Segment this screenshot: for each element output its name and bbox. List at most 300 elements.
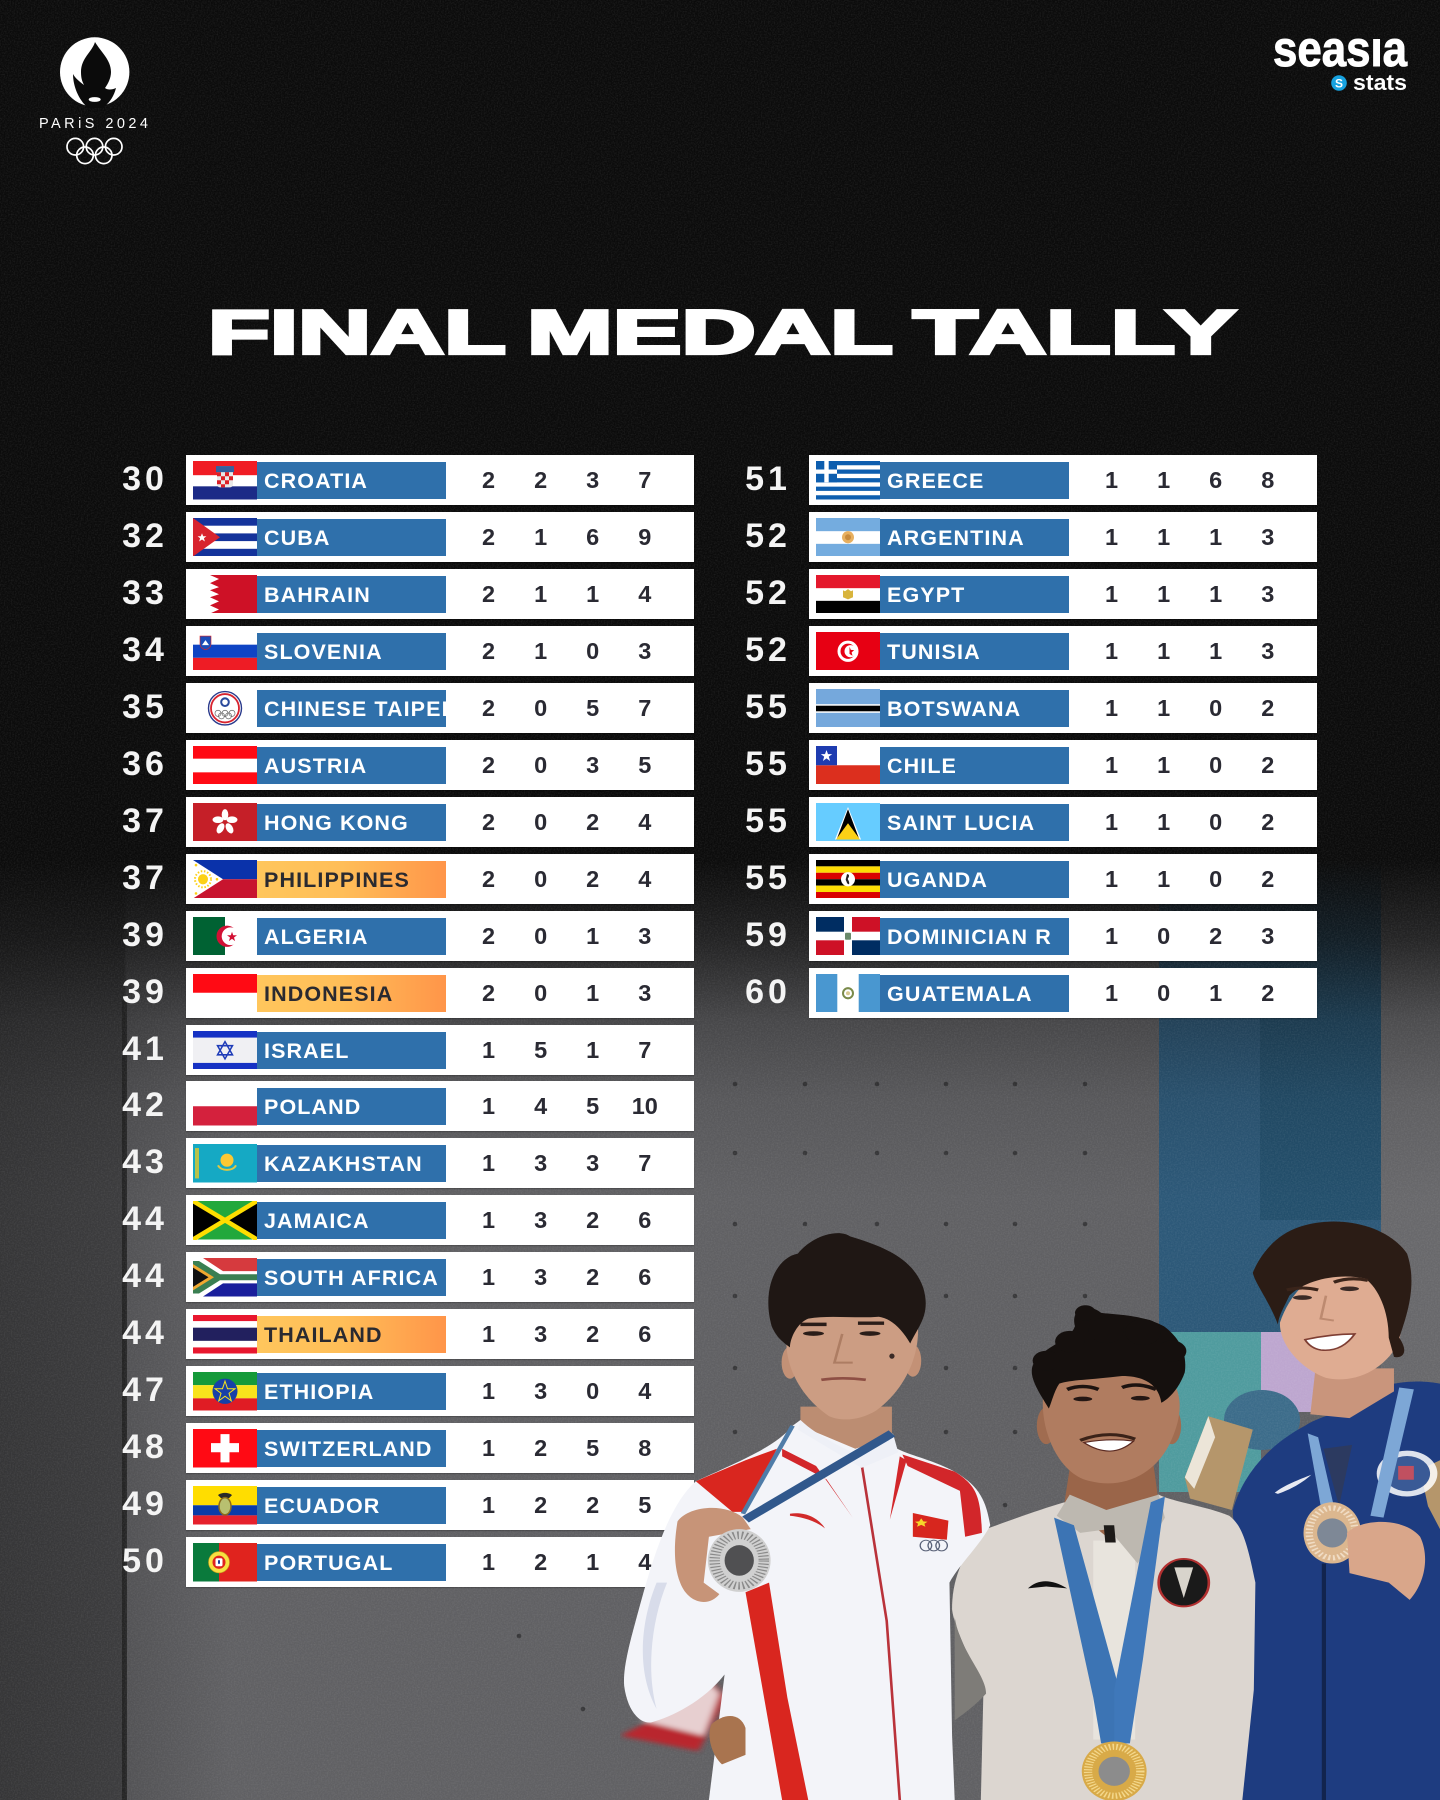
flag: Greece [816,461,880,500]
medal counts [1086,854,1294,904]
flag: Chinese Taipei [208,690,242,726]
medal counts: 1 [534,581,547,607]
row panel [186,1138,694,1188]
medal counts: 1 [1157,809,1170,835]
row panel [186,512,694,562]
rank: 48 [122,1428,168,1466]
logo: Paris 2024 [39,37,148,164]
table: left column ranks 30 to 50 [122,455,694,1588]
row: 37 Hong Kong [122,797,694,847]
medal counts: 1 [1157,581,1170,607]
medal counts: 2 [586,1264,599,1290]
medal counts: 1 [1157,752,1170,778]
row: 39 Indonesia [122,968,694,1019]
medal counts: 1 [1105,980,1118,1006]
rank: 30 [122,460,168,498]
row: 47 Ethiopia [110,1366,694,1416]
country name [257,1544,446,1581]
row: 32 Cuba [122,512,694,562]
row panel [809,968,1317,1018]
medal counts: 1 [534,638,547,664]
row: 55 Uganda [733,854,1317,904]
rank: 60 [745,973,791,1011]
icon: stats coin: S [1335,76,1343,90]
country name [257,1487,446,1524]
emblem: flame in circle [60,37,129,108]
row panel [186,911,694,961]
medal counts: 5 [586,695,599,721]
medal counts [462,1252,671,1302]
rank: 52 [745,574,791,612]
country name: HONG KONG [264,811,409,835]
flag: Jamaica [193,1201,257,1240]
row panel [809,740,1317,790]
medal counts: 2 [586,866,599,892]
medal counts: 0 [534,866,547,892]
country name: EGYPT [887,583,965,607]
rank: 52 [745,517,791,555]
medal counts: 0 [534,980,547,1006]
flag: Poland [193,1106,257,1126]
rank: 37 [122,802,168,840]
rank: 51 [745,460,791,498]
country name [257,975,446,1012]
country name [880,519,1068,556]
medal counts: 1 [586,923,599,949]
medal counts: 2 [534,467,547,493]
medal counts: 2 [586,809,599,835]
row: 35 Chinese Taipei [122,683,694,733]
medal counts: 1 [482,1321,495,1347]
rank: 42 [122,1086,168,1124]
medal counts: 4 [638,866,651,892]
rank: 43 [122,1143,168,1181]
row: 43 Kazakhstan [122,1138,694,1190]
medal counts: 1 [1209,524,1222,550]
medal counts: 2 [586,1321,599,1347]
row: 52 Argentina [733,512,1317,562]
medal counts: 0 [534,752,547,778]
medal counts: 3 [1261,581,1274,607]
row panel [186,1537,694,1587]
medal counts: 4 [638,581,651,607]
country name: AUSTRIA [264,754,367,778]
medal counts: 1 [1209,980,1222,1006]
rank: 39 [122,973,168,1011]
country name [257,462,446,499]
medal counts: 0 [1209,695,1222,721]
row panel [809,569,1317,619]
medal counts: 0 [534,923,547,949]
country name [880,975,1068,1012]
country name [257,747,446,784]
country name [257,1259,446,1296]
medal counts: 1 [1105,524,1118,550]
gold medalist hand on shoulder [709,1716,746,1764]
row panel [186,797,694,847]
country name [257,804,446,841]
row: 60 Guatemala [733,968,1317,1018]
flag: Ethiopia [193,1372,257,1411]
medal counts [462,1195,671,1245]
medal counts [462,1423,671,1473]
medal counts: 5 [586,1435,599,1461]
medal counts: 4 [638,1549,651,1575]
medal counts: 2 [1261,809,1274,835]
row: 50 Portugal [110,1537,694,1587]
country name: CROATIA [264,469,368,493]
row panel [186,1423,694,1473]
medal counts: 7 [638,1150,651,1176]
athletes photo: three medalists [620,1200,1440,1800]
medal counts: 2 [482,866,495,892]
flag: Tunisia [816,632,880,670]
rank: 35 [122,688,168,726]
medal counts: 8 [1261,467,1274,493]
country name [880,918,1068,955]
row: 42 Poland [122,1081,694,1132]
medal counts: 1 [482,1378,495,1404]
flag: South Africa [193,1258,257,1297]
rank: 36 [122,745,168,783]
flag: Argentina [816,518,880,556]
medal counts [1086,911,1294,961]
country name: DOMINICIAN R [887,925,1052,949]
medal counts: 3 [586,1150,599,1176]
row: 55 Chile [733,740,1317,790]
flag: Uganda [816,860,880,898]
flag: Thailand [193,1315,257,1354]
country name: SAINT LUCIA [887,811,1035,835]
row panel [186,1195,694,1245]
row: 55 Saint Lucia [733,797,1317,847]
medal counts: 4 [534,1093,547,1119]
icon: stats coin [1331,75,1347,91]
flag: Austria [193,746,257,784]
flag: Hong Kong [193,803,257,841]
country name [880,462,1068,499]
medal counts: 7 [638,695,651,721]
medal counts [482,467,651,493]
country name: SLOVENIA [264,640,383,664]
country name: ALGERIA [264,925,368,949]
flag: Slovenia [193,636,257,670]
flag: Kazakhstan [193,1144,257,1183]
row: 41 Israel [122,1025,694,1076]
medal counts: 1 [1105,809,1118,835]
flag: Switzerland [193,1429,257,1468]
medal counts: 5 [586,1093,599,1119]
medal counts [482,923,651,949]
row panel [186,683,694,733]
wall dots [517,1082,1087,1711]
medal counts: 6 [638,1207,651,1233]
medal counts: 1 [482,1150,495,1176]
flag: Saint Lucia [816,803,880,841]
olympic rings [67,138,122,164]
medal counts [482,866,652,892]
medal counts [482,980,651,1006]
logo: seasia stats: stats [1353,70,1407,95]
medal counts: 3 [534,1150,547,1176]
medal counts: 1 [1157,866,1170,892]
row panel [809,512,1317,562]
flag: Israel [193,1031,257,1069]
medal counts [482,752,651,778]
rank: 55 [745,688,791,726]
medal counts [1086,569,1294,619]
medal counts: 1 [482,1549,495,1575]
medal counts: 1 [482,1207,495,1233]
flag: Chile [816,746,880,784]
medal counts: 3 [638,923,651,949]
medal counts: 1 [1209,638,1222,664]
row panel [186,455,694,505]
country name: GUATEMALA [887,982,1033,1006]
medal counts: 0 [586,638,599,664]
row: 52 Tunisia [733,626,1317,676]
row panel [186,854,694,904]
row: 49 Ecuador [110,1480,694,1530]
medal counts [462,1537,671,1587]
country name [880,747,1068,784]
medal counts: 2 [482,581,495,607]
flag: Bahrain [210,575,257,613]
country name: BAHRAIN [264,583,371,607]
medal counts: 4 [638,1378,651,1404]
medal counts: 1 [586,980,599,1006]
flag: Cuba [193,518,257,556]
row panel [186,1309,694,1359]
flag: Botswana [816,689,880,727]
table: right column ranks 51 to 60 [733,455,1317,1018]
rank: 34 [122,631,168,669]
rank: 37 [122,859,168,897]
rank: 49 [122,1485,168,1523]
medal counts: 1 [586,1549,599,1575]
medal counts [462,1138,671,1188]
rank: 55 [745,802,791,840]
medal counts: 6 [638,1264,651,1290]
medal counts: 1 [534,524,547,550]
country name: ISRAEL [264,1038,349,1062]
medal counts: 1 [1157,695,1170,721]
rank: 52 [745,631,791,669]
medal counts: 1 [1105,467,1118,493]
rank: 32 [122,517,168,555]
logo: seasia stats [1274,38,1408,95]
row: 30 Croatia [122,455,694,505]
country name [257,519,446,556]
medal counts [1086,512,1294,562]
flag: Egypt [816,575,880,613]
medal counts: 0 [1157,923,1170,949]
medal counts [482,524,651,550]
medal counts: 2 [534,1435,547,1461]
country name: ARGENTINA [887,526,1025,550]
wordmark: PARiS 2024 [39,116,148,132]
country name: JAMAICA [264,1209,370,1233]
medal counts: 2 [534,1549,547,1575]
country name [880,804,1068,841]
medal counts: 3 [534,1378,547,1404]
row: 33 Bahrain [122,569,694,619]
medal counts: 6 [586,524,599,550]
medal counts: 3 [638,638,651,664]
medal counts [1086,740,1294,790]
row panel [186,740,694,790]
row: 59 Dominican Republic [733,911,1317,961]
medal counts: 3 [1261,638,1274,664]
medal counts: 7 [638,1036,651,1062]
row: 44 Jamaica [110,1195,694,1245]
medal counts: 5 [534,1036,547,1062]
medal counts: 2 [1209,923,1222,949]
title [208,300,1240,362]
athlete: gold medalist center [952,1305,1255,1800]
medal counts: 6 [638,1321,651,1347]
rank: 44 [122,1257,168,1295]
flag: Portugal [193,1543,257,1582]
medal counts [1086,968,1294,1018]
flag: Algeria [193,917,237,955]
country name: BOTSWANA [887,697,1021,721]
trophy box [1185,1416,1253,1510]
red blurred holds behind [620,1678,727,1751]
medal counts: 1 [482,1492,495,1518]
medal counts: 3 [534,1207,547,1233]
country name [257,1316,446,1353]
medal counts: 3 [586,752,599,778]
medal counts: 1 [1105,695,1118,721]
medal counts: 2 [482,923,495,949]
country name [880,576,1068,613]
row: 39 Algeria [122,911,694,962]
country name: CHILE [887,754,957,778]
medal counts: 2 [482,467,495,493]
medal counts [482,1093,658,1119]
flag: Guatemala [816,974,880,1012]
country name: CHINESE TAIPEI [264,697,446,721]
medal counts: 2 [1261,866,1274,892]
medal counts: 1 [1105,923,1118,949]
colored wall panels [1159,800,1381,1332]
medal counts [482,638,651,664]
row: 48 Switzerland [110,1423,694,1473]
medal counts: 2 [586,1492,599,1518]
rank: 55 [745,745,791,783]
country name [257,1373,446,1410]
medal counts [462,1366,671,1416]
flag: Ecuador [193,1486,257,1525]
medal counts: 1 [482,1264,495,1290]
medal counts [1086,455,1294,505]
medal counts: 2 [534,1492,547,1518]
medal counts [1086,626,1294,676]
medal counts: 2 [1261,980,1274,1006]
medal counts: 3 [638,980,651,1006]
medal counts [482,581,652,607]
medal counts [462,1309,671,1359]
medal counts: 2 [586,1207,599,1233]
medal counts: 2 [482,980,495,1006]
row: 34 Slovenia [122,626,694,676]
rank: 44 [122,1314,168,1352]
country name: GREECE [887,469,984,493]
row: 44 South Africa [110,1252,694,1302]
medal counts: 10 [632,1093,658,1119]
medal counts: 1 [1105,752,1118,778]
medal counts [482,695,651,721]
rank: 33 [122,574,168,612]
row panel [186,626,694,676]
medal counts: 9 [638,524,651,550]
medal counts: 3 [534,1264,547,1290]
medal counts: 0 [586,1378,599,1404]
rank: 39 [122,916,168,954]
row panel [186,569,694,619]
flag: Philippines [193,860,257,898]
flag: Dominican Republic [816,917,880,955]
medal counts: 1 [586,581,599,607]
country name [257,690,446,727]
medal counts: 2 [482,809,495,835]
country name: INDONESIA [264,982,393,1006]
row panel [809,911,1317,961]
medal counts: 0 [1157,980,1170,1006]
row: 37 Philippines [122,854,694,904]
medal counts: 5 [638,752,651,778]
medal counts: 0 [1209,866,1222,892]
medal counts: 1 [1105,638,1118,664]
medal counts: 1 [482,1036,495,1062]
flag: Indonesia [193,974,257,993]
row: 44 Thailand [110,1309,694,1359]
country name [257,1202,446,1239]
medal counts: 3 [1261,923,1274,949]
row: 51 Greece [733,455,1317,505]
medal counts: 5 [638,1492,651,1518]
medal counts: 0 [1209,752,1222,778]
medal counts: 2 [482,638,495,664]
country name: ECUADOR [264,1494,380,1518]
rank: 55 [745,859,791,897]
medal counts: 3 [1261,524,1274,550]
country name: POLAND [264,1095,361,1119]
medal counts: 1 [1105,866,1118,892]
medal counts: 0 [534,695,547,721]
athlete: bronze medalist right [1233,1222,1440,1800]
country name [257,576,446,613]
medal counts: 0 [534,809,547,835]
medal counts [1086,683,1294,733]
row panel [809,455,1317,505]
country name: PHILIPPINES [264,868,410,892]
rank: 59 [745,916,791,954]
country name [257,633,446,670]
medal counts: 1 [586,1036,599,1062]
medal counts: 7 [638,467,651,493]
medal counts: 1 [1157,467,1170,493]
country name [257,1430,446,1467]
medal counts: 1 [1105,581,1118,607]
country name [257,1145,446,1182]
medal counts: 4 [638,809,651,835]
row panel [186,1081,694,1131]
row panel [809,683,1317,733]
medal counts: 3 [586,467,599,493]
medal counts: 0 [1209,809,1222,835]
